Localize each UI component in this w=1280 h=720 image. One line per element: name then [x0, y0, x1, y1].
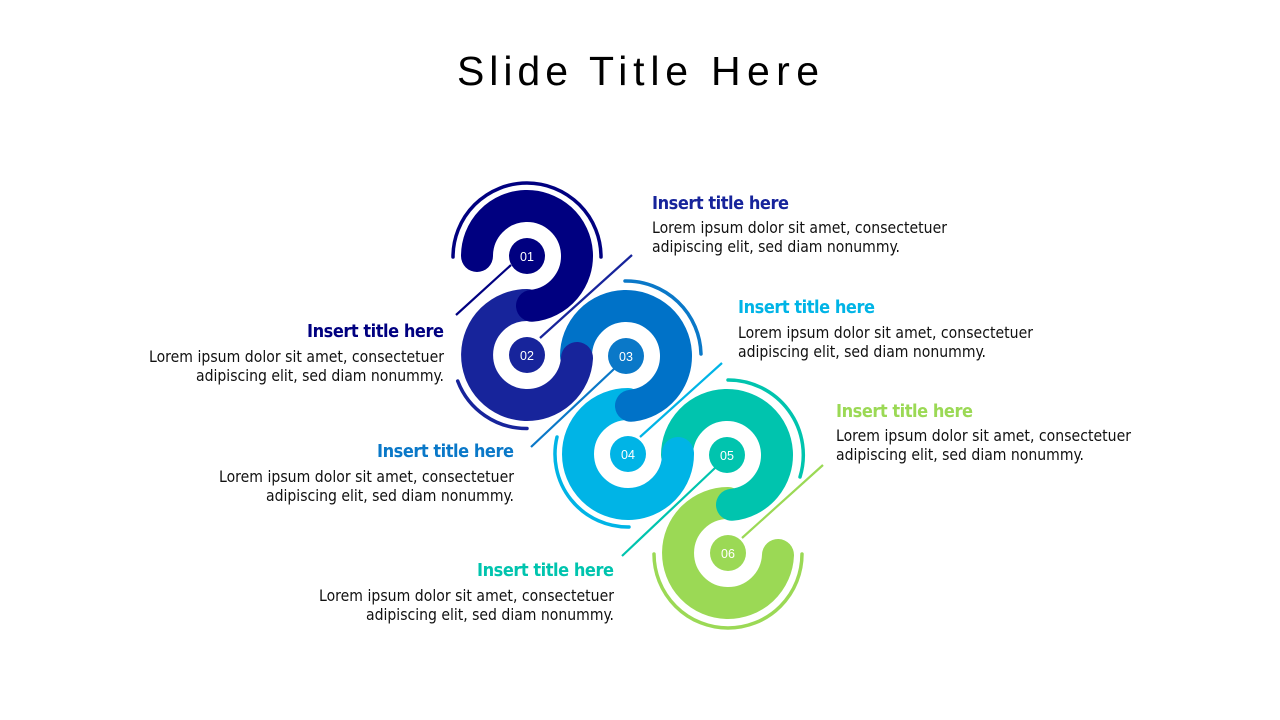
text block 05: Insert title here: [836, 401, 973, 422]
text block 05: Lorem ipsum dolor sit amet, consectetuer: [836, 427, 1131, 445]
segment 05: [622, 380, 803, 556]
text block 05: adipiscing elit, sed diam nonummy.: [836, 446, 1084, 464]
text block 01: Insert title here: [652, 193, 789, 214]
text block 01: [652, 193, 947, 256]
segment 03: 03: [619, 350, 633, 364]
text block 01: Lorem ipsum dolor sit amet, consectetuer: [652, 219, 947, 237]
text block 03: Lorem ipsum dolor sit amet, consectetuer: [738, 324, 1033, 342]
text block 04: [219, 441, 514, 505]
text block 01: adipiscing elit, sed diam nonummy.: [652, 238, 900, 256]
text block 06: Lorem ipsum dolor sit amet, consectetuer: [319, 587, 614, 605]
text block 02: adipiscing elit, sed diam nonummy.: [196, 367, 444, 385]
text block 06: [319, 560, 614, 624]
segment 01: [453, 183, 601, 315]
title: Here: [711, 48, 819, 94]
segment 05: 05: [720, 449, 734, 463]
segment 04: 04: [621, 448, 635, 462]
title: Slide: [457, 48, 568, 94]
segment 06: [654, 465, 823, 628]
text block 04: Lorem ipsum dolor sit amet, consectetuer: [219, 468, 514, 486]
text block 03: [738, 297, 1033, 361]
segment 01: 01: [520, 250, 534, 264]
segment 03: [531, 281, 701, 447]
segment 02: 02: [520, 349, 534, 363]
text block 06: adipiscing elit, sed diam nonummy.: [366, 606, 614, 624]
text block 04: adipiscing elit, sed diam nonummy.: [266, 487, 514, 505]
text block 02: [149, 321, 444, 385]
text block 03: adipiscing elit, sed diam nonummy.: [738, 343, 986, 361]
segment 06: 06: [721, 547, 735, 561]
segment 04: [555, 363, 722, 527]
text block 02: Insert title here: [307, 321, 444, 342]
text block 03: Insert title here: [738, 297, 875, 318]
segment 02: [458, 255, 632, 429]
text block 05: [836, 401, 1131, 464]
text block 06: Insert title here: [477, 560, 614, 581]
title: Title: [589, 48, 688, 94]
text block 04: Insert title here: [377, 441, 514, 462]
text block 02: Lorem ipsum dolor sit amet, consectetuer: [149, 348, 444, 366]
